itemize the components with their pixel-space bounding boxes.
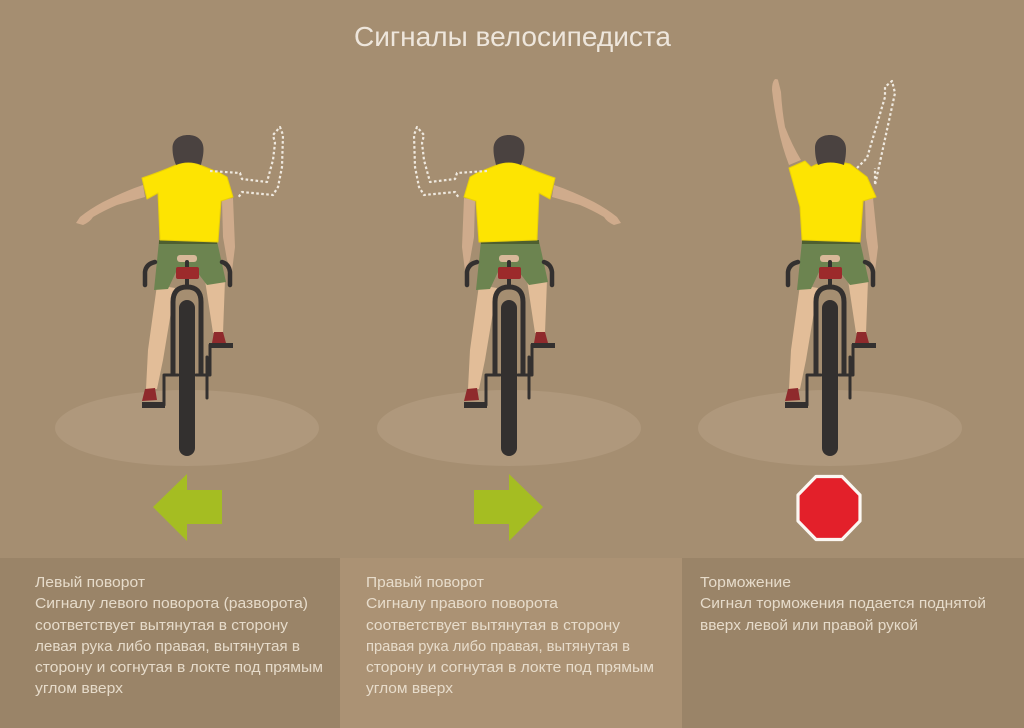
text: braking: Сигнал торможения подается поднятой (700, 596, 986, 612)
text: left turn: углом вверх (35, 681, 124, 697)
text: right turn (366, 575, 654, 697)
text: right turn: сторону и согнутая в локте под прямым (366, 660, 654, 676)
text: left turn: Левый поворот (35, 575, 145, 591)
rear reflector (185, 262, 189, 287)
shirt (142, 162, 233, 242)
shirt (789, 161, 876, 242)
hanging arm (222, 198, 235, 271)
head (172, 135, 204, 165)
cyclist: left turn (55, 127, 319, 466)
text: right turn: Сигналу правого поворота (366, 596, 559, 612)
icon: stop sign (798, 476, 860, 540)
text: left turn: левая рука либо правая, вытянутая в (35, 639, 300, 655)
upper body (414, 127, 621, 271)
ground shadow (55, 390, 319, 466)
raised arm (772, 79, 801, 165)
cranks and pedals (150, 345, 210, 405)
text: braking (700, 575, 986, 634)
text: right turn: углом вверх (366, 681, 454, 697)
text: right turn: соответствует вытянутая в сторону (366, 618, 621, 634)
seat (177, 255, 197, 262)
shoes (142, 332, 226, 401)
icon: right arrow (474, 474, 543, 541)
text: braking: вверх левой или правой рукой (700, 618, 918, 634)
extended arm (76, 185, 145, 225)
ground shadow (377, 390, 641, 466)
panel: right turn (340, 558, 682, 728)
lower body (789, 240, 869, 389)
text: left turn: соответствует вытянутая в сторону (35, 618, 289, 634)
text: left turn: Сигналу левого поворота (разворота) (35, 596, 308, 612)
bicycle (464, 255, 555, 456)
panel: braking (682, 558, 1024, 728)
text: right turn: Правый поворот (366, 575, 484, 591)
icon: left arrow (153, 474, 222, 541)
lower body (468, 240, 548, 389)
text: braking: Торможение (700, 575, 791, 591)
head (815, 135, 846, 165)
dashed raised arm (857, 81, 895, 185)
wheel (179, 300, 195, 456)
panel: left turn (0, 558, 340, 728)
cyclist: right turn (377, 127, 641, 466)
ground shadow (698, 390, 962, 466)
dashed bent arm (210, 127, 283, 198)
fork (173, 287, 201, 374)
shorts (154, 241, 226, 290)
text: left turn: сторону и согнутая в локте под прямым (35, 660, 323, 676)
text: right turn: правая рука либо правая, вытянутая в (366, 639, 630, 655)
title: Сигналы велосипедиста (354, 21, 671, 52)
legs (146, 280, 225, 389)
hanging arm (865, 198, 878, 271)
bicycle (785, 255, 876, 456)
handlebars (145, 262, 230, 285)
cyclist: braking (698, 79, 962, 466)
text: left turn (35, 575, 323, 697)
